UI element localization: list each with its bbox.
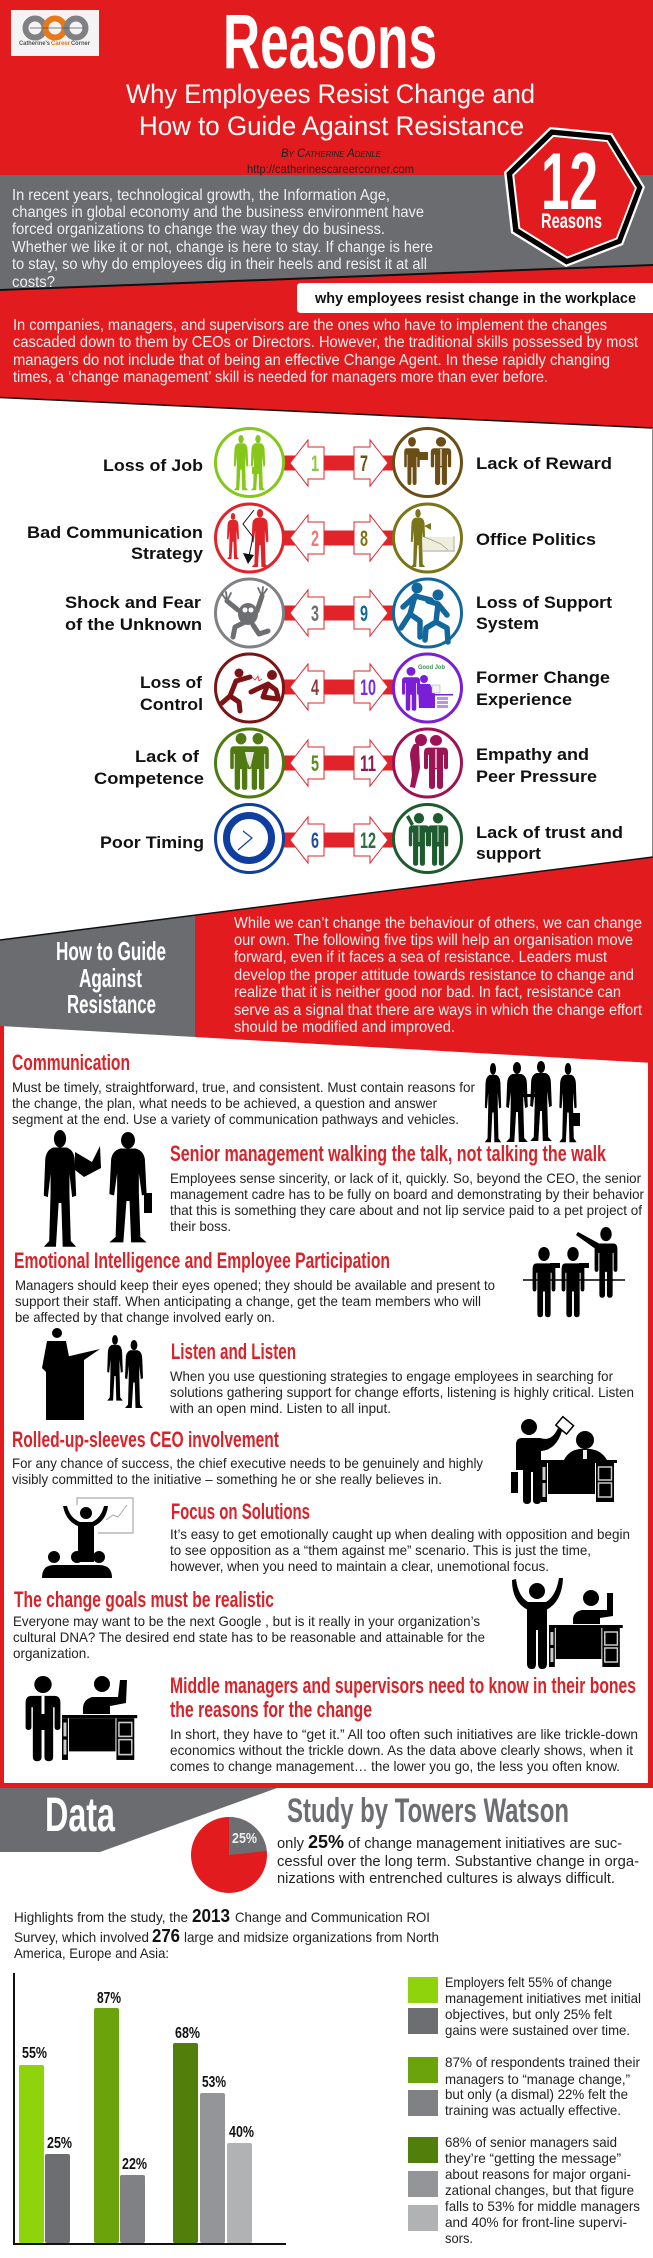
pie chart: 25 percent: 25% (232, 1830, 257, 1847)
reason 4: loss of control: Control (140, 695, 203, 714)
title: Reasons (223, 0, 437, 85)
pie chart: 25 percent (191, 1817, 267, 1893)
highlights paragraph: large and midsize organizations from North (184, 1929, 439, 1945)
tip: listen and listen: solutions gathering support for change efforts, listening is highly critical. Listen (170, 1384, 634, 1400)
reason 7: lack of reward: Lack of Reward (476, 454, 612, 473)
subtitle: How to Guide Against Resistance (139, 111, 524, 141)
legend block 3 (408, 2134, 640, 2246)
reason 6: poor timing (100, 804, 284, 872)
legend block 2: but only (a dismal) 22% felt the (445, 2086, 628, 2102)
gray guide panel (0, 915, 195, 1037)
logo: Career (51, 40, 70, 47)
tip: middle managers: the reasons for the change (170, 1697, 372, 1722)
intro paragraph: costs? (12, 274, 55, 291)
legend block 1: management initiatives met initial (445, 1990, 641, 2006)
tip: focus on solutions: Focus on Solutions (171, 1499, 310, 1524)
badge: 12 reasons: Reasons (541, 210, 602, 233)
legend block 1: objectives, but only 25% felt (445, 2006, 612, 2022)
tip: communication: Communication (12, 1050, 130, 1075)
legend block 3: sors. (445, 2230, 473, 2246)
tip: listen and listen: with an open mind. Listen to all input. (169, 1400, 391, 1416)
intro paragraph: Whether we like it or not, change is here to stay. If change is here (12, 239, 433, 256)
legend block 3: they’re “getting the message” (445, 2150, 621, 2166)
connector bars and arrows: 2 (311, 526, 319, 551)
highlights paragraph: America, Europe and Asia: (14, 1945, 169, 1961)
legend block 3: zational changes, but that figure (445, 2182, 634, 2198)
tip: senior management: their boss. (170, 1218, 231, 1234)
reason 12: lack of trust and support: Lack of trust and (476, 823, 623, 842)
connector bars and arrows: 9 (360, 601, 368, 626)
tip: listen and listen: When you use questioning strategies to engage employees in searching for (170, 1368, 613, 1384)
paragraph: managers: times, a ‘change management’ skill is needed for managers more than ever before. (13, 369, 548, 386)
guide intro paragraph: realize that it is neither good nor bad. In fact, resistance can (234, 984, 621, 1001)
highlights paragraph: 276 (152, 1925, 180, 1946)
reason 8: office politics (394, 504, 596, 572)
guide intro paragraph: forward, even if it faces a sea of resistance. Leaders must (234, 949, 608, 966)
connector bars and arrows: 4 (311, 675, 319, 700)
data banner: Data (45, 1789, 115, 1842)
legend block 1: gains were sustained over time. (445, 2022, 630, 2038)
connector bars and arrows: 10 (360, 675, 376, 700)
tip: change goals realistic: cultural DNA? The desired end state has to be reasonable and attainable for the (13, 1629, 485, 1645)
reason 11: empathy and peer pressure: Empathy and (476, 745, 589, 764)
reason 11: empathy and peer pressure: Peer Pressure (476, 767, 597, 786)
tip: emotional intelligence (14, 1248, 495, 1325)
logo (11, 10, 99, 56)
intro paragraph: to stay, so why do employees dig in their heels and resist it at all (12, 256, 427, 273)
logo: Catherine's (19, 40, 50, 47)
subtitle: Why Employees Resist Change and (126, 79, 535, 109)
tip: listen and listen (169, 1339, 634, 1416)
tip: change goals realistic: Everyone may want to be the next Google , but is it really in your organization’s (13, 1613, 480, 1629)
gray guide panel: Against (79, 963, 142, 993)
reason 12: lack of trust and support (394, 804, 623, 872)
connector bars and arrows: 12 (360, 828, 376, 853)
legend block 3: and 40% for front-line supervi- (445, 2214, 627, 2230)
reason 2: bad communication: Bad Communication (27, 523, 203, 542)
highlights paragraph: 2013 (192, 1905, 230, 1926)
legend block 1: Employers felt 55% of change (445, 1974, 612, 1990)
red border of tips panel (0, 1026, 653, 1788)
tip: emotional intelligence: Managers should keep their eyes opened; they should be available and present to (15, 1277, 495, 1293)
tip: rolled up sleeves (12, 1427, 483, 1487)
guide intro paragraph: serve as a signal that there are ways in which the change effort (234, 1002, 643, 1019)
tip: communication: Must be timely, straightforward, true, and consistent. Must contain reasons for (12, 1079, 475, 1095)
study summary: of change management initiatives are suc- (348, 1835, 622, 1852)
guide intro paragraph: should be modified and improved. (234, 1019, 455, 1036)
intro paragraph: forced organizations to change the way they do business. (12, 221, 385, 238)
byline (247, 148, 414, 176)
tip: middle managers: economics without the trickle down. As the data above clearly shows, when it (170, 1742, 633, 1758)
reason 9: loss of support system: Loss of Support (476, 593, 612, 612)
gray intro band (0, 175, 653, 290)
intro paragraph (12, 187, 433, 291)
reason 3: shock and fear: of the Unknown (65, 615, 202, 634)
bar chart: 68% (175, 2025, 200, 2042)
tip: rolled up sleeves: visibly committed to the initiative – something he or she really believes in. (12, 1471, 442, 1487)
reason 10: former change experience (394, 654, 610, 722)
connector bars and arrows: 8 (360, 526, 368, 551)
bar chart: 87% (97, 1990, 121, 2007)
reason 4: loss of control: Loss of (140, 673, 202, 692)
legend block 1 (408, 1974, 641, 2038)
badge: 12 reasons (504, 127, 645, 267)
legend block 2 (408, 2054, 640, 2118)
study summary (277, 1831, 639, 1887)
bar chart: 55% (22, 2045, 47, 2062)
reason 12: lack of trust and support: support (476, 844, 541, 863)
study summary: 25% (308, 1831, 344, 1852)
paragraph: managers: cascaded down to them by CEOs or Directors. However, the traditional skills possessed by most (13, 334, 639, 351)
byline: http://catherinescareercorner.com (247, 162, 414, 176)
tip: change goals realistic (13, 1587, 485, 1661)
bar chart: 53% (202, 2074, 226, 2091)
reason 5: lack of competence (94, 729, 284, 797)
reason 7: lack of reward (394, 428, 612, 496)
tip: communication: segment at the end. Use a variety of communication pathways and vehicles. (12, 1111, 459, 1127)
intro paragraph: changes in global economy and the business environment have (12, 204, 424, 221)
legend block 3: 68% of senior managers said (445, 2134, 617, 2150)
tip: focus on solutions: to see opposition as a “them against me” scenario. This is just the time, (170, 1542, 591, 1558)
tip: focus on solutions (170, 1499, 630, 1574)
guide intro paragraph: develop the proper attitude towards resistance to change and (234, 967, 634, 984)
icon: man handing paper to boss (511, 1417, 617, 1504)
connector bars and arrows (284, 440, 394, 863)
reason 3: shock and fear: Shock and Fear (65, 593, 201, 612)
byline: By Catherine Adenle (281, 148, 382, 160)
reason 11: empathy and peer pressure (394, 729, 597, 797)
study summary: only (277, 1835, 304, 1852)
study summary: nizations with entrenched cultures is always difficult. (277, 1870, 615, 1887)
reason 10: former change experience: Former Change (476, 668, 610, 687)
icon: four business people (485, 1061, 580, 1142)
legend block 3: falls to 53% for middle managers (445, 2198, 640, 2214)
bar chart: 25% (47, 2135, 72, 2152)
bar chart: 22% (122, 2156, 147, 2173)
icon: podium speaker (42, 1328, 143, 1420)
banner: why employees resist (297, 283, 653, 313)
reason 1: loss of job (103, 428, 284, 496)
reason 3: shock and fear (65, 579, 284, 647)
gray guide panel: Resistance (67, 989, 156, 1019)
connector bars and arrows: 11 (360, 751, 376, 776)
connector bars and arrows: 6 (311, 828, 319, 853)
study summary: cessful over the long term. Substantive change in orga- (277, 1853, 639, 1870)
tip: emotional intelligence: be affected by that change involved early on. (15, 1309, 275, 1325)
intro paragraph: In recent years, technological growth, the Information Age, (12, 187, 390, 204)
tip: senior management: that this is something they care about and not lip service paid to a pet project of (170, 1202, 642, 1218)
reason 1: loss of job: Loss of Job (103, 456, 203, 475)
paragraph: managers: In companies, managers, and supervisors are the ones who have to implement the changes (13, 317, 607, 334)
tip: focus on solutions: however, when you need to maintain a clear, unemotional focus. (170, 1558, 549, 1574)
icon: man at desk with manager (26, 1676, 137, 1761)
paragraph: managers (13, 317, 639, 386)
icon: presenter with audience (42, 1498, 133, 1578)
legend block 2: managers to “manage change,” (445, 2071, 630, 2087)
gray guide panel: How to Guide (56, 936, 166, 966)
reason 5: lack of competence: Competence (94, 769, 204, 788)
tip: change goals realistic: organization. (13, 1645, 90, 1661)
reason 8: office politics: Office Politics (476, 530, 596, 549)
reason 6: poor timing: Poor Timing (100, 833, 204, 852)
guide intro paragraph (234, 915, 643, 1036)
bar chart (13, 1973, 286, 2245)
connector bars and arrows: 7 (360, 451, 368, 476)
reason 10: former change experience: Experience (476, 690, 572, 709)
connector bars and arrows: 5 (311, 751, 319, 776)
icon: team members (523, 1227, 625, 1317)
legend block 3: about reasons for major organi- (445, 2166, 631, 2182)
tip: focus on solutions: It’s easy to get emotionally caught up when dealing with opposition and begin (170, 1526, 630, 1542)
tip: senior management: management cadre has to be fully on board and demonstrating by their behavior (170, 1186, 644, 1202)
tip: emotional intelligence: Emotional Intelligence and Employee Participation (14, 1248, 390, 1273)
reason 9: loss of support system: System (476, 614, 539, 633)
badge: 12 reasons: 12 (541, 137, 598, 227)
paragraph: managers: managers do not include that of being an effective Change Agent. In these rapidly changing (13, 352, 610, 369)
tip: communication (12, 1050, 475, 1127)
tip: listen and listen: Listen and Listen (171, 1339, 296, 1364)
connector bars and arrows: 1 (311, 451, 319, 476)
legend block 2: training was actually effective. (445, 2102, 621, 2118)
red header background (0, 0, 653, 430)
legend block 2: 87% of respondents trained their (445, 2054, 640, 2070)
guide intro paragraph: our own. The following five tips will help an organisation move (234, 932, 633, 949)
tip: middle managers: In short, they have to “get it.” All too often such initiatives are like trickle-down (170, 1726, 638, 1742)
banner: why employees resist: why employees resist change in the workplace (314, 291, 636, 307)
white reasons section (0, 398, 653, 945)
red guide panel (195, 857, 653, 1063)
reason 10: former change experience: Good Job (418, 664, 445, 671)
highlights paragraph: Highlights from the study, the (14, 1909, 188, 1925)
reason 4: loss of control (140, 654, 284, 722)
tip: rolled up sleeves: For any chance of success, the chief executive needs to be genuinely and highly (12, 1455, 483, 1471)
reason 2: bad communication: Strategy (131, 544, 204, 563)
tip: middle managers (170, 1673, 638, 1774)
connector bars and arrows: 3 (311, 601, 319, 626)
highlights paragraph (14, 1905, 439, 1961)
guide intro paragraph: While we can’t change the behaviour of others, we can change (234, 915, 642, 932)
tip: middle managers: comes to change management… the lower you go, the less you often know. (170, 1758, 620, 1774)
logo: Corner (71, 40, 90, 47)
tip: senior management: Employees sense sincerity, or lack of it, quickly. So, beyond the CEO, the senior (170, 1170, 641, 1186)
highlights paragraph: Survey, which involved (14, 1929, 149, 1945)
icon: man with raised arms at desk (512, 1578, 623, 1669)
tip: rolled up sleeves: Rolled-up-sleeves CEO involvement (12, 1427, 279, 1452)
tip: senior management (170, 1141, 644, 1234)
highlights paragraph: Change and Communication ROI (235, 1909, 430, 1925)
tip: communication: the change, the plan, what needs to be achieved, a question and answer (12, 1095, 437, 1111)
subtitle (126, 79, 535, 141)
reason 2: bad communication (27, 504, 284, 572)
reason 9: loss of support system (394, 579, 612, 647)
icon: two executives (44, 1130, 152, 1247)
tip: emotional intelligence: support their staff. When anticipating a change, get the team members who will (15, 1293, 481, 1309)
tip: change goals realistic: The change goals must be realistic (14, 1587, 274, 1612)
reason 5: lack of competence: Lack of (135, 747, 199, 766)
bar chart: 40% (229, 2124, 254, 2141)
data banner (0, 1788, 277, 1852)
